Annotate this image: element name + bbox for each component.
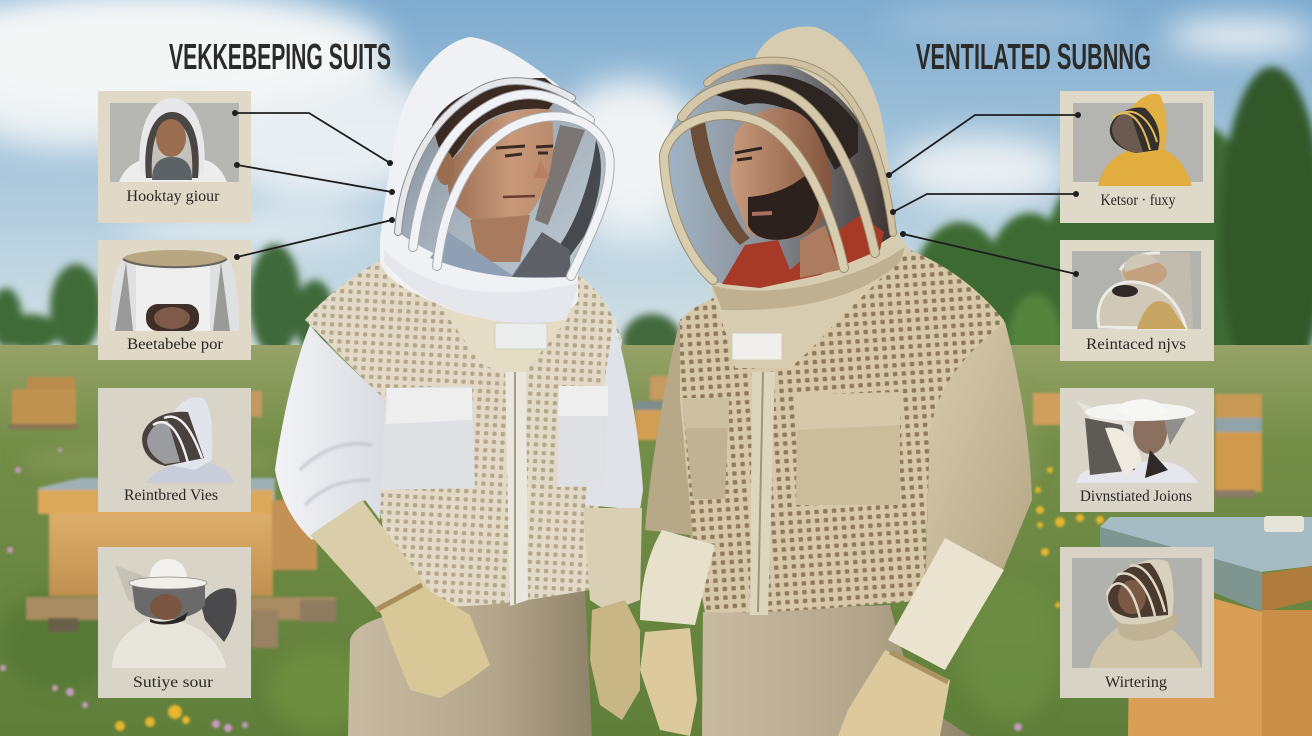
panel: left card 4 (98, 547, 251, 698)
left man visor (398, 78, 612, 278)
right man mesh torso (680, 248, 1005, 613)
title right: VENTILATED SUBNNG (916, 36, 1151, 77)
left man pockets (380, 386, 608, 490)
right man beard (748, 170, 819, 240)
right man red shirt (722, 215, 884, 288)
panel: right card 2 (1060, 240, 1214, 361)
panel: left card 1: Hooktay giour (126, 188, 220, 205)
right man pockets (682, 392, 900, 505)
left man hair (432, 78, 562, 168)
right man face (730, 108, 832, 240)
left man face (448, 109, 553, 226)
background: tree lines (0, 67, 1312, 403)
right man visor (662, 60, 893, 288)
right man in tan ventilated suit (640, 27, 1032, 736)
background: right foreground hive (1100, 516, 1312, 736)
left man trousers (348, 590, 592, 736)
panel: left card 3 (98, 388, 251, 512)
panel: right card 4: Wirtering (1105, 674, 1167, 691)
panel: left card 4: Sutiye sour (133, 674, 214, 691)
background: flowers (0, 448, 1104, 732)
panel: right card 1 (1060, 91, 1214, 223)
panel: left card 2: Beetabebe por (127, 336, 224, 353)
panel: right card 3: Divnstiated Joions (1080, 488, 1192, 505)
left man shirt (430, 232, 571, 278)
right man right sleeve (925, 322, 1032, 590)
panel: right card 1: Ketsor · fuxy (1100, 192, 1176, 209)
left man in white ventilated suit (275, 37, 643, 736)
left man mesh torso (305, 255, 622, 606)
panel: left card 3: Reintbred Vies (124, 487, 218, 504)
panel: right card 2: Reintaced njvs (1086, 336, 1186, 353)
right man visor hoops (664, 61, 893, 280)
background: meadow (0, 345, 1312, 736)
left man hood (380, 37, 612, 323)
panel: right card 3 (1060, 388, 1214, 512)
background: wooden hives (8, 376, 1262, 648)
left man right sleeve (585, 320, 643, 510)
leader lines right (886, 112, 1081, 277)
right man hood (662, 27, 908, 368)
right man trousers (702, 605, 970, 736)
right man zipper (750, 372, 775, 615)
panel: right card 4 (1060, 547, 1214, 698)
background: sky with clouds (0, 0, 1312, 380)
right man left sleeve (645, 320, 700, 590)
left man left sleeve (275, 325, 385, 540)
left man cuffs and gloves (310, 500, 642, 720)
left man visor hoops (398, 81, 610, 276)
left man zipper (505, 362, 528, 606)
right man hair (716, 75, 858, 170)
panel: left card 1 (98, 91, 251, 223)
right man cuffs and gloves (640, 530, 1004, 736)
leader lines left (232, 110, 395, 260)
left man yoke and label (440, 305, 575, 372)
panel: left card 2 (98, 240, 251, 360)
title left: VEKKEBEPING SUITS (169, 36, 391, 77)
